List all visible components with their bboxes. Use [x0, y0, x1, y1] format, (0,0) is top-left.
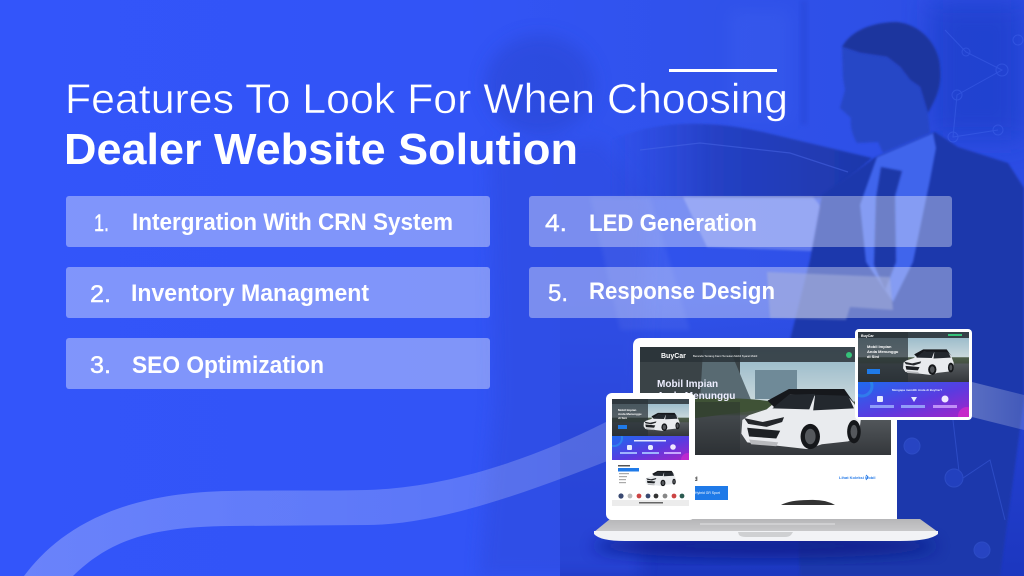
tablet screen hero: Anda Menunggu — [867, 349, 899, 354]
tablet screen hero: BuyCar — [861, 334, 874, 338]
laptop hero — [640, 347, 891, 455]
laptop shadow — [593, 534, 937, 558]
tablet screen hero — [858, 332, 969, 382]
panel: item 4 — [529, 196, 952, 247]
tie — [874, 167, 902, 290]
hair — [842, 22, 940, 113]
paper — [767, 272, 893, 320]
tablet hero: Mobil Impian — [618, 408, 636, 412]
panel: item 1: 1. — [94, 210, 109, 237]
panel: item 1: Intergration With CRN System — [132, 209, 453, 236]
tablet gradient section — [612, 436, 689, 460]
background photo: man in suit — [767, 22, 1024, 576]
background photo: car — [590, 124, 872, 330]
decorative wave band — [24, 382, 1024, 576]
laptop hero: Anda Menunggu — [657, 391, 735, 402]
laptop mockup — [593, 338, 938, 558]
background photo: blurred woman — [480, 35, 650, 576]
laptop screen — [633, 338, 897, 522]
panel: item 2 — [66, 267, 490, 318]
panel: item 2: Inventory Managment — [131, 280, 369, 307]
tablet mockup (left) — [606, 393, 695, 520]
panel: item 4: 4. — [545, 210, 567, 237]
panel: item 3: 3. — [90, 352, 111, 379]
panel: item 4: LED Generation — [589, 210, 757, 237]
tablet hero — [612, 399, 689, 436]
suit — [790, 132, 1024, 576]
title line 2: Dealer Website Solution — [64, 125, 578, 174]
laptop page content: d — [694, 477, 698, 483]
face — [840, 47, 930, 153]
laptop base — [594, 519, 938, 541]
panel: item 2: 2. — [90, 281, 111, 308]
laptop hero: BuyCar — [661, 353, 686, 360]
laptop hero: Mobil Impian — [657, 379, 718, 390]
panel: item 1 — [66, 196, 490, 247]
laptop hero: Beranda Tentang Kami Temukan Mobil Syarat Mobil — [693, 354, 758, 358]
tablet hero: Anda Menunggu — [618, 412, 642, 416]
tablet page list — [612, 465, 689, 506]
tablet screen hero: di Sini — [867, 354, 879, 359]
laptop page content: Hybrid GR Sport — [695, 491, 720, 495]
title — [64, 69, 788, 174]
laptop page content: Lihat Koleksi Mobil — [839, 475, 875, 480]
tablet mockup (right) — [855, 329, 972, 420]
shirt — [860, 133, 936, 302]
background network icons — [904, 30, 1023, 558]
panel: item 5: 5. — [548, 280, 568, 307]
panel: item 3 — [66, 338, 490, 389]
panel: item 5 — [529, 267, 952, 318]
panel: item 5: Response Design — [589, 278, 775, 305]
tablet screen gradient section: Mengapa memilih Anda di BuyCar? — [892, 388, 942, 392]
accent line — [669, 69, 777, 72]
panel: item 3: SEO Optimization — [132, 352, 324, 379]
laptop page content — [690, 475, 875, 505]
tablet screen hero: Mobil Impian — [867, 344, 892, 349]
car photo — [741, 389, 861, 449]
tablet hero: di Sini — [618, 416, 627, 420]
title line 1: Features To Look For When Choosing — [65, 75, 788, 122]
